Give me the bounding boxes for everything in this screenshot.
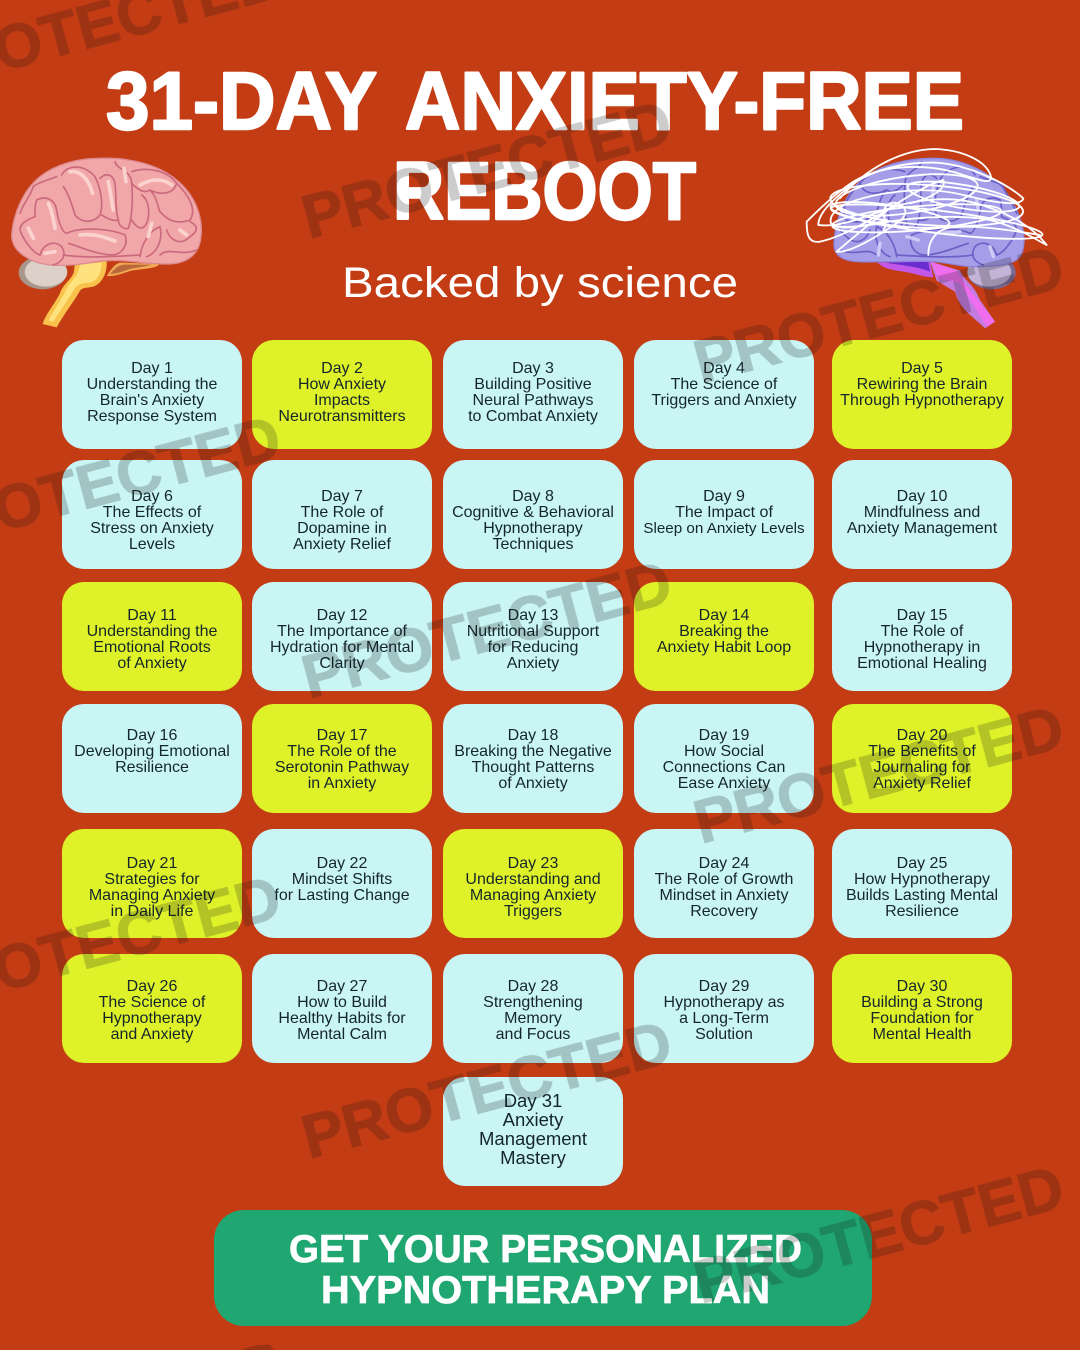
card: day 4: The Science of — [671, 376, 777, 393]
card: day 11: Understanding the — [87, 623, 217, 640]
card: day 9: The Impact of — [675, 504, 773, 521]
scribble lines over the violet brain — [807, 149, 1047, 255]
card: day 17 — [252, 704, 432, 813]
card: day 1: Brain's Anxiety — [100, 392, 204, 409]
card: day 2: Neurotransmitters — [278, 408, 406, 425]
card: day 12: Clarity — [319, 655, 365, 672]
card: day 27: Mental Calm — [297, 1026, 387, 1043]
card: day 10 — [832, 460, 1012, 569]
card: day 15: Hypnotherapy in — [864, 639, 980, 656]
card: day 29: Solution — [695, 1026, 753, 1043]
card: day 7: Dopamine in — [297, 520, 387, 537]
header: title, subtitle and brain illustrations — [11, 56, 1048, 328]
card: day 24: The Role of Growth — [655, 871, 793, 888]
card: day 13 — [443, 582, 623, 691]
card: day 15: The Role of — [881, 623, 963, 640]
card: day 22 — [252, 829, 432, 938]
card: day 13: Day 13 — [508, 607, 558, 624]
card: day 23: Managing Anxiety — [470, 887, 596, 904]
card: day 23: Understanding and — [465, 871, 601, 888]
card: day 3: Building Positive — [474, 376, 592, 393]
icon: healthy pink brain — [12, 158, 201, 327]
watermark: repeating PROTECTED stamps: PROTECTED — [687, 693, 1071, 858]
subtitle: Backed by science — [342, 259, 738, 307]
card: day 26 — [62, 954, 242, 1063]
card: day 8 — [443, 460, 623, 569]
card: day 3: to Combat Anxiety — [468, 408, 598, 425]
card: day 12: Hydration for Mental — [270, 639, 414, 656]
watermark: repeating PROTECTED stamps: PROTECTED — [687, 1153, 1071, 1318]
card: day 4: Day 4 — [703, 360, 745, 377]
card: day 25 — [832, 829, 1012, 938]
card: day 9: Day 9 — [703, 488, 745, 505]
card: day 10: Anxiety Management — [847, 520, 997, 537]
card: day 9 — [634, 460, 814, 569]
card: day 27 — [252, 954, 432, 1063]
card: day 6 — [62, 460, 242, 569]
card: day 2 — [252, 340, 432, 449]
card: day 16: Resilience — [115, 759, 189, 776]
card: day 21: Managing Anxiety — [89, 887, 215, 904]
title — [106, 56, 964, 237]
card: day 30: Building a Strong — [861, 994, 983, 1011]
title: REBOOT — [393, 146, 696, 237]
card: day 1 — [62, 340, 242, 449]
card: day 25: Builds Lasting Mental — [846, 887, 998, 904]
card: day 10: Mindfulness and — [864, 504, 980, 521]
card: day 20: Day 20 — [897, 727, 947, 744]
card: day 4: Triggers and Anxiety — [651, 392, 797, 409]
card: day 3: Neural Pathways — [473, 392, 593, 409]
card: day 25: How Hypnotherapy — [854, 871, 990, 888]
card: day 26: and Anxiety — [111, 1026, 193, 1043]
card: day 29: Hypnotherapy as — [664, 994, 784, 1011]
watermark: repeating PROTECTED stamps: PROTECTED — [295, 1008, 679, 1173]
card: day 23: Triggers — [504, 903, 562, 920]
card: day 12: Day 12 — [317, 607, 367, 624]
card: day 5: Day 5 — [901, 360, 943, 377]
card: day 16: Developing Emotional — [74, 743, 230, 760]
card: day 28: Strengthening — [483, 994, 583, 1011]
card: day 8: Cognitive & Behavioral — [452, 504, 614, 521]
card: day 19: Ease Anxiety — [678, 775, 770, 792]
card: day 30: Foundation for — [870, 1010, 974, 1027]
card: day 16: Day 16 — [127, 727, 177, 744]
card: day 13: Nutritional Support — [467, 623, 599, 640]
card: day 15 — [832, 582, 1012, 691]
card: day 9: Sleep on Anxiety Levels — [643, 520, 805, 537]
card: day 30: Day 30 — [897, 978, 947, 995]
card: day 21: in Daily Life — [111, 903, 193, 920]
title: ANXIETY-FREE — [405, 56, 964, 147]
card: day 29 — [634, 954, 814, 1063]
card: day 18: Breaking the Negative — [454, 743, 612, 760]
card: day 17: Day 17 — [317, 727, 367, 744]
card: day 17: Serotonin Pathway — [275, 759, 409, 776]
card: day 14 — [634, 582, 814, 691]
icon: tangled violet brain — [807, 149, 1047, 328]
card: day 4 — [634, 340, 814, 449]
card: day 7 — [252, 460, 432, 569]
card: day 8: Techniques — [493, 536, 573, 553]
card: day 30 — [832, 954, 1012, 1063]
card: day 2: Day 2 — [321, 360, 363, 377]
card: day 7: Anxiety Relief — [293, 536, 391, 553]
card: day 19 — [634, 704, 814, 813]
card: day 6: Day 6 — [131, 488, 173, 505]
card: day 31: Anxiety — [503, 1109, 563, 1130]
card: day 2: How Anxiety — [298, 376, 386, 393]
card: day 5 — [832, 340, 1012, 449]
card: day 31 — [443, 1077, 623, 1186]
card: day 10: Day 10 — [897, 488, 947, 505]
card: day 11 — [62, 582, 242, 691]
card: day 7: The Role of — [301, 504, 383, 521]
card: day 21: Day 21 — [127, 855, 177, 872]
card: day 26: Day 26 — [127, 978, 177, 995]
card: day 18: Thought Patterns — [472, 759, 594, 776]
watermark: repeating PROTECTED stamps: PROTECTED — [295, 88, 679, 253]
card: day 27: Healthy Habits for — [278, 1010, 406, 1027]
card: day 17: The Role of the — [287, 743, 397, 760]
card: day 24 — [634, 829, 814, 938]
card: day 19: Day 19 — [699, 727, 749, 744]
card: day 5: Rewiring the Brain — [857, 376, 987, 393]
card: day 25: Day 25 — [897, 855, 947, 872]
card: day 15: Day 15 — [897, 607, 947, 624]
card: day 3: Day 3 — [512, 360, 554, 377]
card: day 14: Breaking the — [679, 623, 769, 640]
card: day 22: for Lasting Change — [274, 887, 410, 904]
card: day 27: Day 27 — [317, 978, 367, 995]
card: day 11: Day 11 — [127, 607, 177, 624]
watermark: repeating PROTECTED stamps: PROTECTED — [687, 233, 1071, 398]
card: day 28: and Focus — [496, 1026, 570, 1043]
card: day 31: Mastery — [500, 1147, 566, 1168]
card: day 15: Emotional Healing — [857, 655, 987, 672]
card: day 21: Strategies for — [104, 871, 200, 888]
card: day 29: a Long-Term — [679, 1010, 769, 1027]
card: day 1: Day 1 — [131, 360, 173, 377]
card: day 22: Mindset Shifts — [292, 871, 392, 888]
title: 31-DAY — [106, 56, 377, 147]
card: day 24: Recovery — [690, 903, 758, 920]
card: day 19: How Social — [684, 743, 764, 760]
card: day 20: Journaling for — [874, 759, 970, 776]
card: day 16 — [62, 704, 242, 813]
card: day 13: for Reducing — [488, 639, 578, 656]
card: day 12 — [252, 582, 432, 691]
card: day 28: Day 28 — [508, 978, 558, 995]
card: day 2: Impacts — [314, 392, 370, 409]
card: day 20: The Benefits of — [868, 743, 976, 760]
card: day 23: Day 23 — [508, 855, 558, 872]
card: day 13: Anxiety — [507, 655, 559, 672]
card: day 8: Hypnotherapy — [483, 520, 583, 537]
card: day 18 — [443, 704, 623, 813]
card: day 28 — [443, 954, 623, 1063]
card: day 23 — [443, 829, 623, 938]
card: day 5: Through Hypnotherapy — [840, 392, 1004, 409]
card: day 14: Day 14 — [699, 607, 749, 624]
card: day 20 — [832, 704, 1012, 813]
card: day 20: Anxiety Relief — [873, 775, 971, 792]
call to action button — [214, 1210, 872, 1326]
card: day 19: Connections Can — [663, 759, 785, 776]
card: day 8: Day 8 — [512, 488, 554, 505]
card: day 6: The Effects of — [103, 504, 201, 521]
call to action button: HYPNOTHERAPY PLAN — [321, 1269, 770, 1312]
card: day 30: Mental Health — [873, 1026, 971, 1043]
card: day 29: Day 29 — [699, 978, 749, 995]
card: day 11: Emotional Roots — [93, 639, 211, 656]
card: day 22: Day 22 — [317, 855, 367, 872]
card: day 17: in Anxiety — [308, 775, 376, 792]
card: day 26: The Science of — [99, 994, 205, 1011]
card: day 18: Day 18 — [508, 727, 558, 744]
card: day 25: Resilience — [885, 903, 959, 920]
card: day 12: The Importance of — [277, 623, 407, 640]
card: day 1: Response System — [87, 408, 217, 425]
card: day 11: of Anxiety — [117, 655, 187, 672]
card: day 7: Day 7 — [321, 488, 363, 505]
card: day 21 — [62, 829, 242, 938]
watermark: repeating PROTECTED stamps: PROTECTED — [295, 548, 679, 713]
card: day 18: of Anxiety — [498, 775, 568, 792]
card: day 24: Mindset in Anxiety — [660, 887, 788, 904]
card: day 3 — [443, 340, 623, 449]
card: day 26: Hypnotherapy — [102, 1010, 202, 1027]
card: day 24: Day 24 — [699, 855, 749, 872]
card: day 31: Day 31 — [504, 1090, 562, 1111]
card: day 6: Levels — [129, 536, 175, 553]
card: day 1: Understanding the — [87, 376, 217, 393]
card: day 28: Memory — [504, 1010, 562, 1027]
call to action button: GET YOUR PERSONALIZED — [289, 1228, 802, 1271]
card: day 31: Management — [479, 1128, 587, 1149]
card: day 14: Anxiety Habit Loop — [657, 639, 791, 656]
card: day 6: Stress on Anxiety — [90, 520, 214, 537]
card: day 27: How to Build — [297, 994, 387, 1011]
